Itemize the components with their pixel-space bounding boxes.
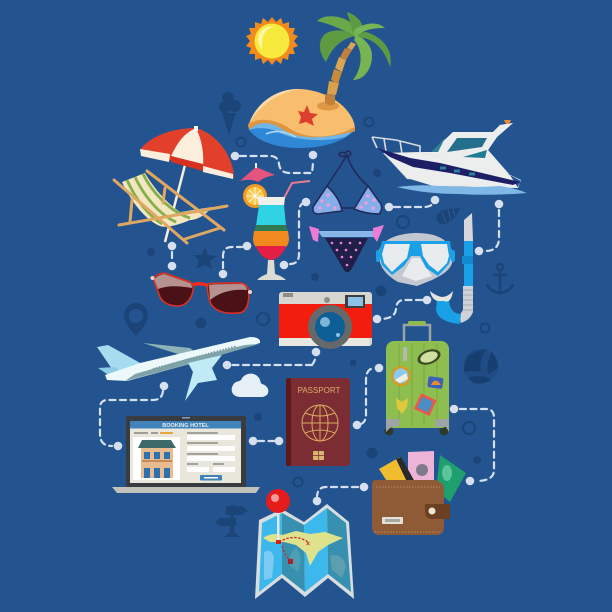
starfish <box>298 105 318 126</box>
map land: × <box>306 541 310 548</box>
palm fronds <box>317 16 356 38</box>
straps <box>327 151 368 186</box>
booking header: BOOKING HOTEL <box>162 423 209 429</box>
bottom <box>318 231 377 237</box>
airplane <box>97 337 260 401</box>
palm trunk <box>325 42 356 105</box>
water <box>397 185 527 195</box>
sunglasses <box>150 273 252 313</box>
fuselage <box>105 337 260 381</box>
orange slice <box>243 184 267 208</box>
credit card <box>379 457 415 486</box>
booking header <box>130 421 241 429</box>
icon: location pin silhouette <box>124 303 148 336</box>
parasol <box>240 167 275 182</box>
icon: starfish silhouette <box>193 247 217 269</box>
hull <box>383 123 521 188</box>
beach umbrella <box>140 126 234 242</box>
icon: anchor silhouette <box>487 264 513 293</box>
glass <box>257 197 285 206</box>
island sand <box>248 89 355 139</box>
far wing <box>143 343 200 356</box>
icon: sun <box>246 17 298 65</box>
laptop with booking site <box>112 416 260 493</box>
suitcase <box>384 321 449 436</box>
green banknote <box>436 455 466 502</box>
handle <box>404 325 430 342</box>
stickers <box>391 346 444 416</box>
passport title: PASSPORT <box>298 386 341 395</box>
diving mask <box>376 233 455 286</box>
wallet body <box>372 480 444 535</box>
cabin windows <box>447 138 487 152</box>
icon: beach ball silhouette <box>464 348 498 384</box>
icon: shell silhouette <box>436 208 460 224</box>
top cups <box>313 186 342 214</box>
bikini <box>309 151 384 272</box>
camera <box>279 292 372 349</box>
lens <box>308 305 352 349</box>
booking form <box>187 432 235 480</box>
cloud <box>232 374 268 397</box>
wallet clasp <box>425 504 450 519</box>
tail <box>97 345 142 372</box>
near wing <box>185 355 222 401</box>
speedboat <box>372 120 527 195</box>
snorkel <box>430 213 473 324</box>
island with palm tree <box>248 12 391 148</box>
hotel picture <box>133 437 180 480</box>
icon: signpost silhouette <box>215 505 248 537</box>
dashed route lines <box>100 156 499 496</box>
icon: ice cream silhouette <box>219 92 241 135</box>
straw <box>284 181 310 198</box>
deck chair <box>114 171 227 243</box>
passport globe <box>302 405 338 441</box>
wheels <box>384 426 394 436</box>
sea <box>249 124 354 148</box>
map pin <box>266 489 290 544</box>
passport <box>286 378 350 466</box>
corner guards <box>386 419 449 432</box>
rating stars <box>134 432 173 434</box>
passport chip <box>313 451 324 460</box>
folded world map with pin <box>255 489 354 599</box>
pink banknote <box>408 451 434 486</box>
wallet with money and card <box>372 451 466 535</box>
cocktail with parasol and orange slice <box>240 163 310 280</box>
